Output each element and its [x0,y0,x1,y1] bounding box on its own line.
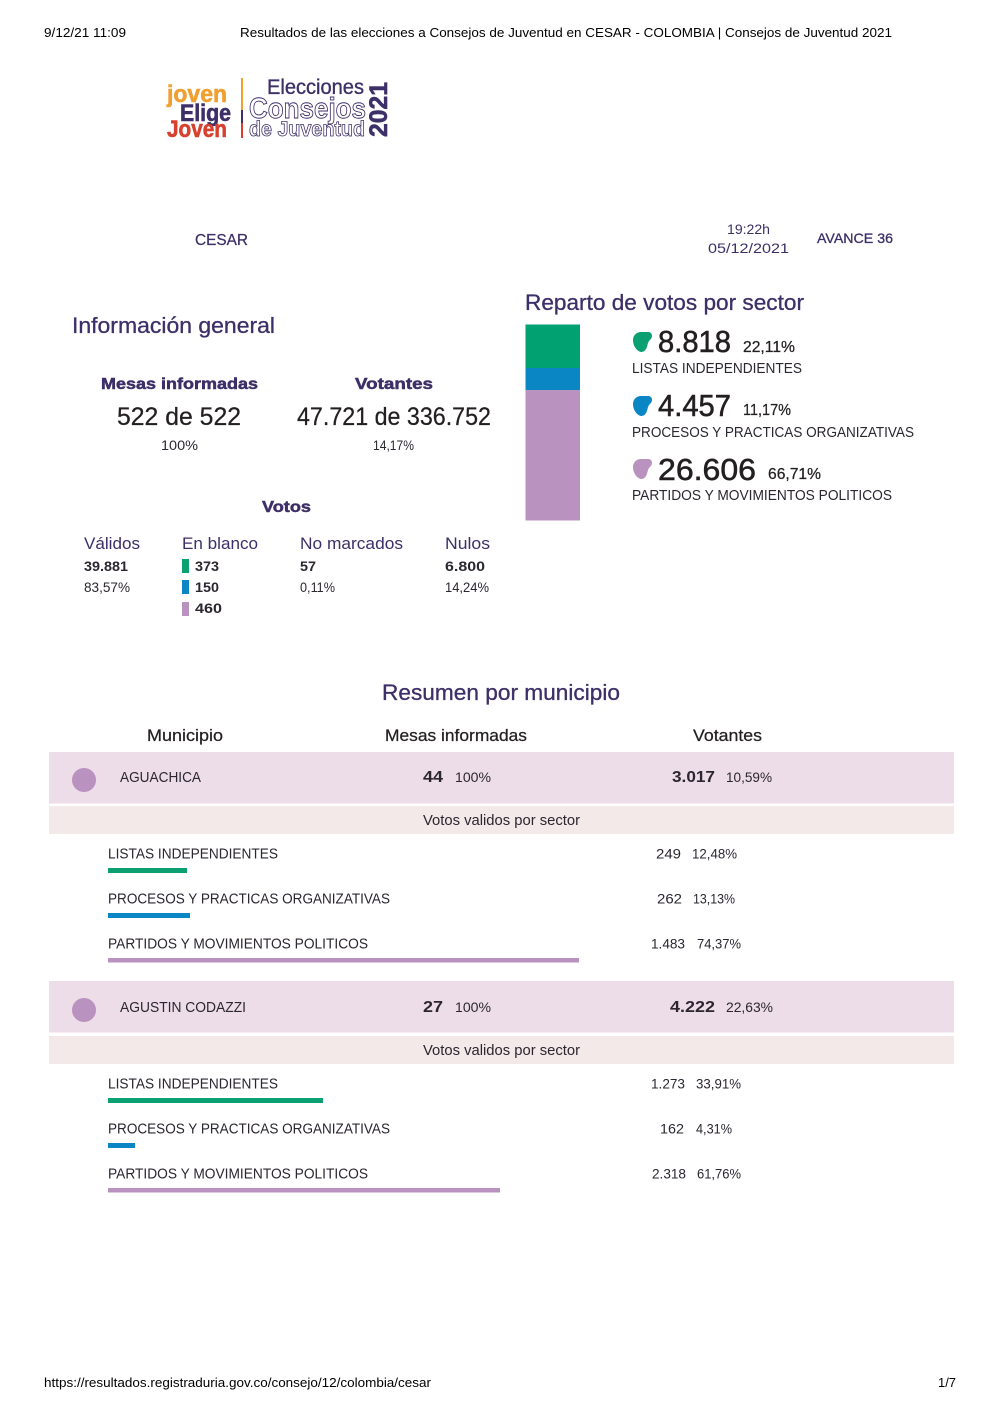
sector: parties and political movements: PARTIDOS Y MOVIMIENTOS POLITICOS [632,488,892,504]
update time and date: 05/12/2021 [708,240,789,256]
bar: independent lists [108,1076,741,1103]
sector: organizational processes [632,388,914,441]
bar: independent lists: 249 [656,846,681,862]
bar: political parties [108,936,741,962]
heading: general information: Información general [72,313,275,338]
votes: blank by sector [182,534,258,616]
stat: voters: 47.721 de 336.752 [297,403,491,431]
sector: organizational processes: 11,17% [743,402,791,419]
sector: parties and political movements: 26.606 [658,452,756,487]
bar: organizational processes: PROCESOS Y PRACTICAS ORGANIZATIVAS [108,892,390,908]
sector: organizational processes: PROCESOS Y PRACTICAS ORGANIZATIVAS [632,425,914,441]
municipality row: 3.017 [672,769,715,786]
votes: valid: 83,57% [84,579,130,595]
sector: organizational processes: 4.457 [658,388,731,423]
municipality row: 22,63% [726,999,773,1015]
bar: independent lists: LISTAS INDEPENDIENTES [108,846,278,862]
bar: political parties: 74,37% [697,936,741,952]
bar: organizational processes: PROCESOS Y PRACTICAS ORGANIZATIVAS [108,1122,390,1138]
municipality row: 4.222 [670,999,715,1016]
sector subheader: Votos validos por sector [423,1043,580,1059]
panel: vote distribution by sector [525,290,914,520]
stat: polling stations reported: 522 de 522 [117,403,241,431]
sector subheader: Votos validos por sector [423,813,580,829]
votes: valid: Válidos [84,534,140,553]
stacked bar chart [526,324,580,520]
municipality row: AGUACHICA [120,770,201,786]
municipality row: AGUSTIN CODAZZI [120,1000,246,1016]
municipality row: 10,59% [726,769,772,785]
votes: blank by sector: 373 [195,558,219,574]
browser print footer: 1/7 [938,1375,956,1390]
bar: organizational processes: 262 [657,890,682,906]
votes: unmarked [300,534,403,595]
bar: political parties: PARTIDOS Y MOVIMIENTOS POLITICOS [108,936,368,952]
sector: independent lists [632,324,802,377]
logo: Joven Elige Joven, Elecciones Consejos de Juventud 2021: de Juventud [249,118,365,141]
votes: blank by sector: 150 [195,579,219,595]
sector: independent lists: 8.818 [658,324,731,359]
logo: Joven Elige Joven, Elecciones Consejos de Juventud 2021 [166,76,393,143]
panel: general information [72,313,491,616]
sector: independent lists: LISTAS INDEPENDIENTES [632,361,802,377]
logo: Joven Elige Joven, Elecciones Consejos de Juventud 2021: Consejos [249,93,366,125]
heading: votes: Votos [262,499,311,516]
votes: valid: 39.881 [84,558,128,574]
bar: independent lists: 12,48% [692,846,737,862]
votes: valid [84,534,140,595]
icon: green map shape [633,332,652,352]
browser print header: Resultados de las elecciones a Consejos de Juventud en CESAR - COLOMBIA | Consejos de Juventud 2021 [240,25,892,40]
table column headers: Municipio [147,726,223,745]
update time and date: 19:22h [727,221,770,237]
table column headers: Votantes [693,726,762,745]
browser print header: 9/12/21 11:09 [44,25,126,40]
bar: political parties: 1.483 [651,936,685,952]
bar: organizational processes: 13,13% [693,890,735,906]
progress label: AVANCE 36 [817,230,893,246]
votes: unmarked: 0,11% [300,579,335,595]
stat: voters [297,376,491,453]
sector: parties and political movements [632,452,892,504]
browser print footer: https://resultados.registraduria.gov.co/consejo/12/colombia/cesar [44,1375,432,1390]
bar: organizational processes: 4,31% [696,1120,732,1136]
logo: Joven Elige Joven, Elecciones Consejos de Juventud 2021: Joven [167,116,227,143]
bar: independent lists: 33,91% [696,1076,741,1092]
bar: political parties [108,1166,741,1192]
panel: Aguachica [49,752,954,962]
votes: blank by sector: 460 [195,600,222,616]
bar: political parties: 2.318 [652,1166,686,1182]
logo: Joven Elige Joven, Elecciones Consejos de Juventud 2021: joven [166,81,227,108]
browser print footer [44,1375,956,1390]
bar: independent lists: LISTAS INDEPENDIENTES [108,1076,278,1092]
update time and date [708,221,789,256]
bar: independent lists: 1.273 [651,1076,685,1092]
heading: vote distribution: Reparto de votos por sector [525,290,804,315]
icon: blue map shape [633,396,652,416]
votes: unmarked: 57 [300,558,316,574]
sector: parties and political movements: 66,71% [768,466,821,483]
votes: unmarked: No marcados [300,534,403,553]
logo: Joven Elige Joven, Elecciones Consejos de Juventud 2021: 2021 [365,82,393,137]
votes: null: Nulos [445,534,490,553]
panel: Agustin Codazzi [49,981,954,1192]
logo: Joven Elige Joven, Elecciones Consejos de Juventud 2021: Elige [180,100,231,127]
bar: independent lists [108,846,737,873]
municipality row [49,752,954,804]
bar: organizational processes [108,1120,732,1148]
stat: polling stations reported: Mesas informadas [101,376,258,393]
municipality row: 27 [423,999,443,1016]
stat: polling stations reported [101,376,258,453]
logo: Joven Elige Joven, Elecciones Consejos de Juventud 2021: Elecciones [267,76,364,99]
votes: null [445,534,490,595]
municipality row: 44 [423,769,443,786]
heading: municipality summary: Resumen por municipio [382,680,620,705]
bar: organizational processes: 162 [660,1120,684,1136]
votes: null: 14,24% [445,579,489,595]
department name: CESAR [195,232,248,249]
icon: purple map shape [633,459,652,479]
stat: voters: Votantes [355,376,433,393]
table column headers: Mesas informadas [385,726,527,745]
municipality row: 100% [455,769,491,785]
bar: organizational processes [108,890,735,918]
votes: null: 6.800 [445,558,485,574]
sector subheader [49,806,954,834]
sector: independent lists: 22,11% [743,339,795,356]
stat: voters: 14,17% [373,437,414,453]
sector subheader [49,1036,954,1064]
votes: blank by sector: En blanco [182,534,258,553]
bar: political parties: 61,76% [697,1166,741,1182]
stat: polling stations reported: 100% [161,437,198,453]
municipality row [49,981,954,1032]
municipality row: 100% [455,999,491,1015]
table column headers [147,726,762,745]
bar: political parties: PARTIDOS Y MOVIMIENTOS POLITICOS [108,1166,368,1182]
